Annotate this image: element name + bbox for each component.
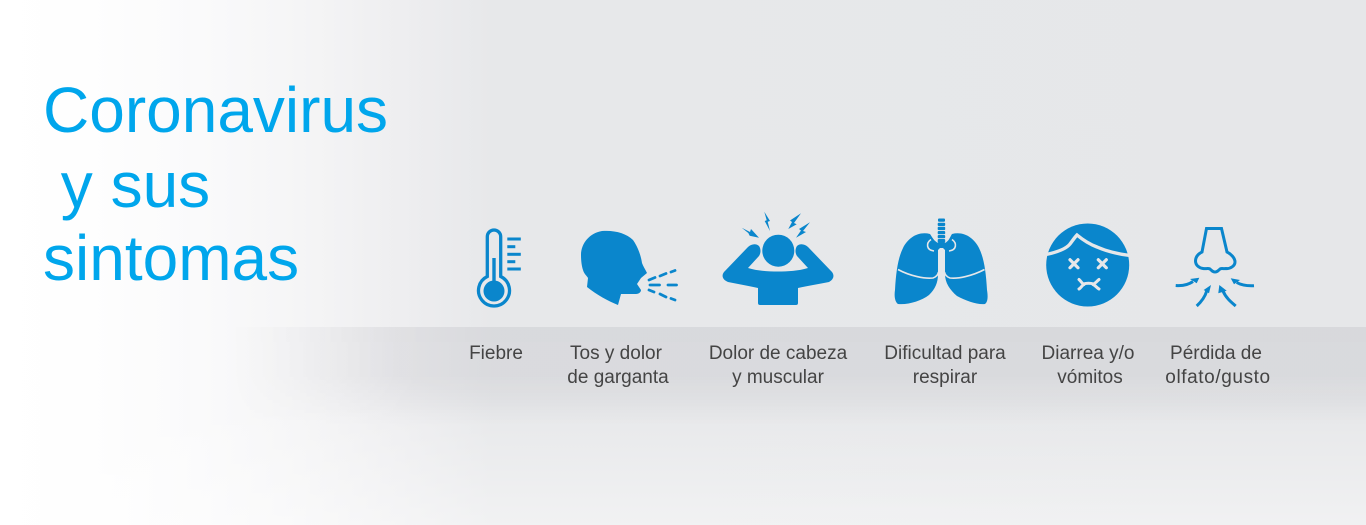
label: Pérdida de olfato/gusto: olfato/gusto <box>1165 367 1271 388</box>
icon: thermometer <box>478 230 521 306</box>
label: Pérdida de olfato/gusto: Pérdida de <box>1170 343 1262 364</box>
label: Dolor de cabeza y muscular <box>709 343 848 388</box>
icon: coughing head <box>581 231 676 305</box>
label: Diarrea y/o vómitos: vómitos <box>1057 367 1123 388</box>
label: Tos y dolor de garganta: de garganta <box>567 367 669 388</box>
label: Diarrea y/o vómitos: Diarrea y/o <box>1042 343 1134 364</box>
title: Coronavirus <box>43 74 388 146</box>
label: Dolor de cabeza y muscular: y muscular <box>732 367 824 388</box>
label: Pérdida de olfato/gusto <box>1165 343 1271 388</box>
label: Dificultad para respirar: Dificultad para <box>884 343 1006 364</box>
icon: nose with arrows <box>1176 228 1254 306</box>
label: Tos y dolor de garganta: Tos y dolor <box>570 343 662 364</box>
label: Dolor de cabeza y muscular: Dolor de cabeza <box>709 343 847 364</box>
label: Diarrea y/o vómitos <box>1042 343 1134 388</box>
title: sintomas <box>43 222 299 294</box>
title: y sus <box>61 149 210 221</box>
title <box>43 74 388 294</box>
icon: headache person <box>723 212 833 305</box>
label: Dificultad para respirar: respirar <box>913 367 977 388</box>
label: Tos y dolor de garganta <box>567 343 669 388</box>
icon: lungs <box>895 218 988 304</box>
label: Fiebre: Fiebre <box>469 343 523 364</box>
label: Dificultad para respirar <box>884 343 1006 388</box>
icon: sick face <box>1046 224 1130 306</box>
